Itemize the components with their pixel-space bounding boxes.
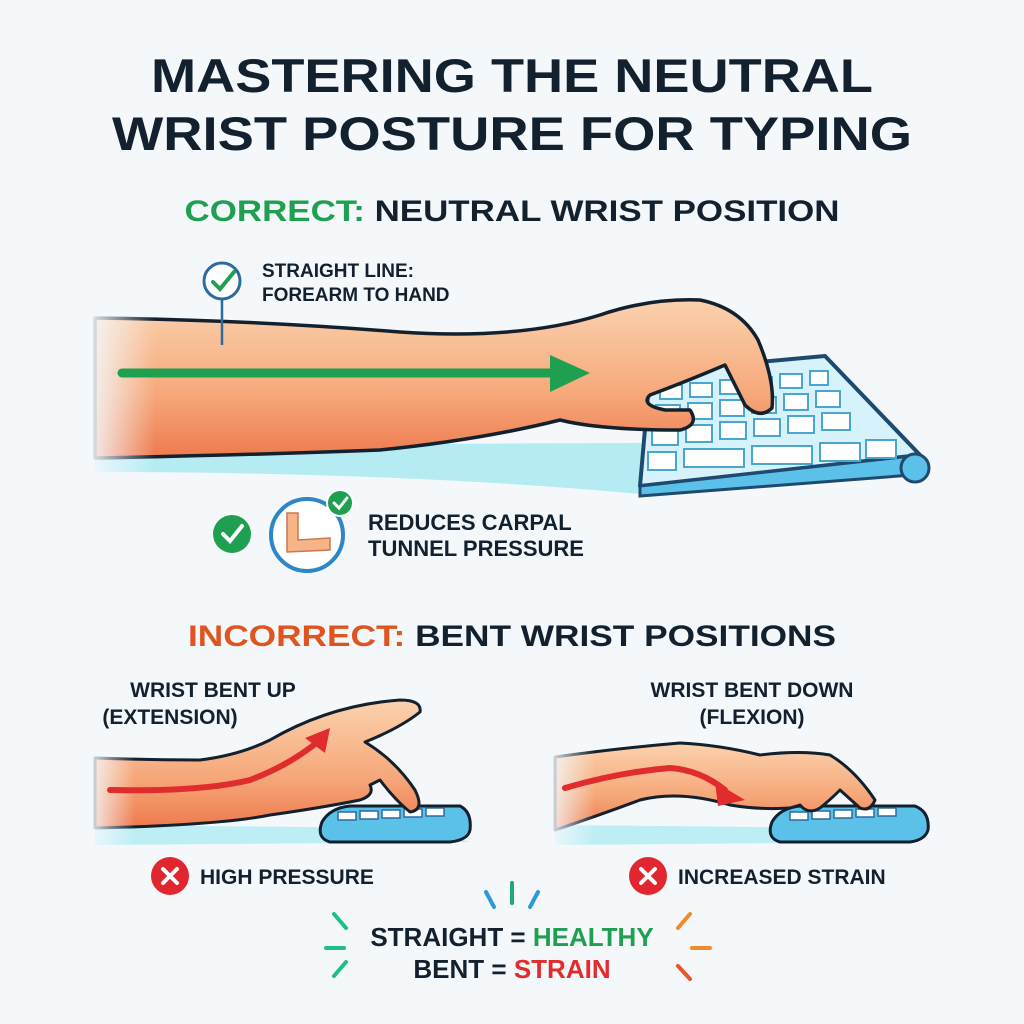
panel: wrist bent up: WRIST BENT UP bbox=[130, 679, 296, 702]
title: MASTERING THE NEUTRAL bbox=[151, 49, 873, 102]
panel: wrist bent down: (FLEXION) bbox=[700, 706, 804, 729]
panel: wrist bent down bbox=[545, 679, 928, 895]
benefit: reduces carpal tunnel pressure: TUNNEL PRESSURE bbox=[368, 536, 584, 561]
summary bbox=[326, 883, 710, 984]
benefit: reduces carpal tunnel pressure bbox=[213, 490, 584, 571]
heading: correct: CORRECT: NEUTRAL WRIST POSITION bbox=[184, 195, 840, 228]
panel: wrist bent down: INCREASED STRAIN bbox=[678, 866, 886, 889]
panel: wrist bent up: (EXTENSION) bbox=[102, 706, 238, 729]
callout: straight line: STRAIGHT LINE: bbox=[262, 261, 414, 282]
panel: wrist bent down: WRIST BENT DOWN bbox=[651, 679, 853, 702]
illustration: neutral wrist on keyboard bbox=[85, 300, 929, 496]
arrow: red up bbox=[110, 728, 330, 790]
icon: green check bbox=[213, 515, 251, 553]
callout: straight line: FOREARM TO HAND bbox=[262, 285, 450, 306]
summary: BENT = STRAIN bbox=[413, 954, 611, 984]
arrow: green straight bbox=[122, 355, 590, 392]
arrow: red down bbox=[565, 768, 745, 806]
arm bbox=[95, 300, 772, 458]
callout: straight line bbox=[204, 261, 450, 345]
panel: wrist bent up: HIGH PRESSURE bbox=[200, 866, 374, 889]
title: WRIST POSTURE FOR TYPING bbox=[112, 107, 912, 160]
heading: incorrect: INCORRECT: BENT WRIST POSITIONS bbox=[188, 620, 836, 653]
title bbox=[112, 49, 912, 160]
icon: red x bbox=[151, 857, 189, 895]
icon: elbow circle bbox=[271, 490, 353, 571]
summary: STRAIGHT = HEALTHY bbox=[370, 922, 654, 952]
benefit: reduces carpal tunnel pressure: REDUCES CARPAL bbox=[368, 510, 572, 535]
panel: wrist bent up bbox=[85, 679, 470, 895]
keyboard bbox=[640, 356, 929, 496]
